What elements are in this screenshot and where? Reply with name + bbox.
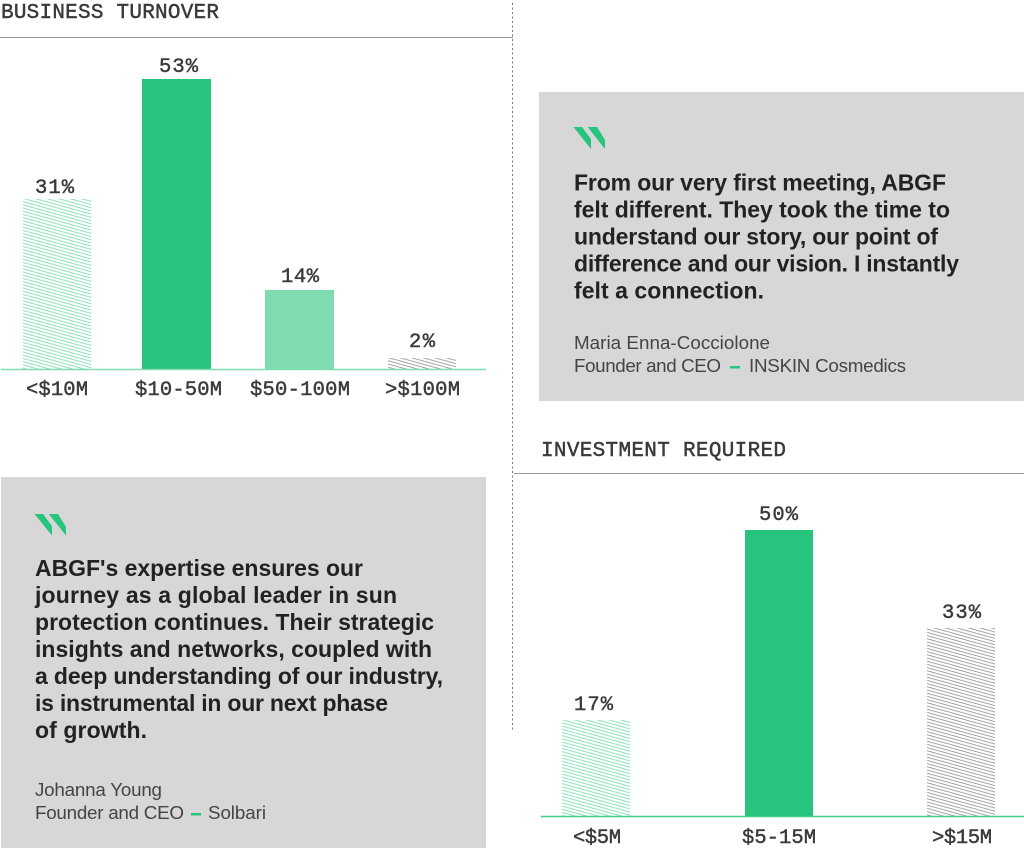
quote text: is instrumental in our next phase <box>35 690 388 716</box>
bar: under $5M <box>562 694 630 848</box>
quote text <box>34 555 443 743</box>
heading: business turnover: BUSINESS TURNOVER <box>1 2 219 25</box>
bar: over $15M <box>927 602 995 848</box>
attribution: Maria Enna-Cocciolone <box>574 332 770 353</box>
attribution: INSKIN Cosmedics <box>749 355 906 376</box>
bar: over $15M: 33% <box>942 602 982 625</box>
attribution <box>574 332 906 376</box>
icon: quotation mark <box>34 514 66 536</box>
quote text: felt a connection. <box>574 278 764 304</box>
bar: $50-100M: $50-100M <box>250 379 350 402</box>
quote text: protection continues. Their strategic <box>35 609 434 635</box>
attribution <box>35 779 266 823</box>
bar: under $10M: <$10M <box>26 379 88 402</box>
panel: quote Maria Enna-Cocciolone <box>539 92 1024 401</box>
heading: investment required: INVESTMENT REQUIRED <box>541 440 786 463</box>
axis line <box>541 816 1024 818</box>
bar: over $100M: >$100M <box>385 379 460 402</box>
quote text: a deep understanding of our industry, <box>35 663 443 689</box>
axis line <box>1 368 486 370</box>
bar: over $100M: 2% <box>409 331 436 354</box>
bar: over $100M <box>385 331 460 402</box>
bar: under $10M <box>23 177 91 402</box>
quote text: felt different. They took the time to <box>574 196 950 222</box>
bar: under $10M: 31% <box>35 177 75 200</box>
bar: $5-15M: 50% <box>759 504 799 527</box>
attribution: Johanna Young <box>35 779 162 800</box>
bar: under $5M: 17% <box>574 694 614 717</box>
quote text: insights and networks, coupled with <box>35 636 432 662</box>
quote text: From our very first meeting, ABGF <box>574 170 946 196</box>
quote text: understand our story, our point of <box>574 224 938 250</box>
bar: $5-15M <box>742 504 816 848</box>
bar: $10-50M: $10-50M <box>135 379 222 402</box>
icon: quotation mark <box>574 127 605 149</box>
attribution: Solbari <box>208 802 266 823</box>
bar chart: investment required <box>541 504 1024 848</box>
quote text: ABGF's expertise ensures our <box>35 555 363 581</box>
quote text: of growth. <box>35 717 147 743</box>
bar: $50-100M <box>250 266 350 402</box>
panel: quote Johanna Young <box>1 477 486 848</box>
bar: $10-50M <box>135 56 222 402</box>
attribution: Founder and CEO <box>35 802 184 823</box>
quote text <box>574 170 959 304</box>
bar: $10-50M: 53% <box>159 56 199 79</box>
attribution: Founder and CEO <box>574 355 721 376</box>
bar: $50-100M: 14% <box>281 266 320 289</box>
bar chart: business turnover <box>1 56 486 402</box>
quote text: journey as a global leader in sun <box>34 582 397 608</box>
quote text: difference and our vision. I instantly <box>574 250 959 276</box>
